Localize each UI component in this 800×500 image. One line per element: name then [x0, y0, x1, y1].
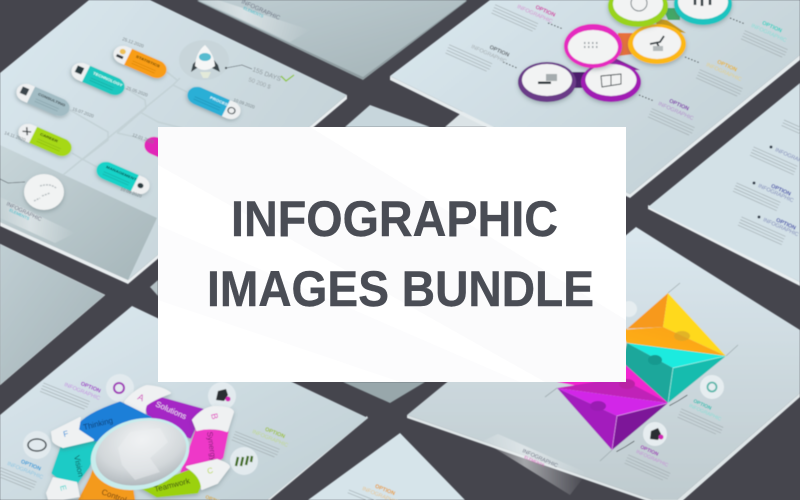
- segment: solutions: A: [136, 392, 146, 403]
- option label: purple: INFOGRAPHIC: [63, 382, 101, 402]
- title: [207, 191, 594, 317]
- timeline connector tree: [63, 72, 187, 175]
- pill: consulting: CONSULTING: [37, 91, 67, 108]
- timeline dates: 14.11.2020: [4, 130, 27, 143]
- sheet: bottom centre: [308, 433, 465, 500]
- segment: synergy: [182, 407, 233, 472]
- tip rules: [545, 283, 738, 461]
- timeline dates: 12.01.2020: [132, 132, 155, 145]
- title: IMAGES BUNDLE: [207, 261, 594, 317]
- days counter: 155 DAYS: [251, 66, 282, 83]
- pill: statistics: [110, 43, 170, 81]
- option label: orange: [348, 475, 401, 500]
- sheet: top-left timeline: [0, 0, 347, 284]
- option label: blue: OPTION: [20, 459, 42, 473]
- timeline dates: 15.07.2020: [72, 106, 95, 119]
- connectors: [572, 8, 686, 88]
- segment: solutions: Solutions: [154, 400, 188, 421]
- option label: teal triangle: [667, 390, 729, 436]
- title: INFOGRAPHIC: [231, 191, 558, 247]
- globe: [83, 408, 197, 500]
- timeline dates: 10.09.2020: [120, 186, 143, 199]
- sheet: top centre circles infographic: [390, 0, 800, 198]
- option label: magenta: [491, 0, 556, 37]
- option label: green: [232, 417, 291, 460]
- option label: purple triangle: OPTION: [639, 444, 659, 458]
- option label: grey: OPTION: [488, 45, 510, 59]
- segment: synergy: Synergy: [205, 431, 218, 461]
- pyramid purple: [557, 388, 668, 450]
- circle: teal: [674, 0, 732, 25]
- rocket badge: [179, 40, 229, 80]
- pill: management: MANAGEMENT: [105, 164, 138, 182]
- option label: purple triangle: [614, 436, 676, 482]
- option label: teal triangle: INFOGRAPHIC: [688, 403, 722, 423]
- segment: vision: E: [58, 484, 68, 492]
- list item 3: [738, 204, 800, 249]
- option label: yellow: INFOGRAPHIC: [705, 62, 742, 83]
- list item 3: OPTION: [775, 217, 797, 232]
- circle: magenta: [564, 24, 622, 68]
- segment: thinking: F: [62, 429, 69, 439]
- pill: process: PROCESS: [209, 95, 232, 108]
- list item 2: [733, 170, 796, 215]
- pyramid yellow: [620, 293, 726, 356]
- segment: thinking: Thinking: [82, 416, 114, 432]
- list item 2: OPTION: [770, 183, 792, 198]
- stamp text: ELEMENTS: [9, 207, 31, 221]
- pill: process: [184, 84, 244, 122]
- segment: control: [78, 463, 135, 500]
- icon circles: [23, 374, 258, 475]
- option label: magenta: OPTION: [534, 5, 556, 19]
- option label: teal: [741, 15, 795, 58]
- sheet: right list: [648, 83, 800, 286]
- circle: lime: [608, 0, 668, 27]
- days counter: 50 200 $: [247, 77, 272, 91]
- sheet: behind card pieces: [150, 105, 527, 403]
- segment: solutions: [125, 386, 202, 437]
- option label: yellow: OPTION: [716, 59, 738, 73]
- timeline dates: [4, 36, 256, 199]
- option label: purple: INFOGRAPHIC: [657, 101, 694, 122]
- icon: badge yellow: [621, 301, 637, 317]
- option label: purple: [40, 368, 103, 413]
- list item 0 lines: [782, 120, 800, 138]
- pill: technology: TECHNOLOGY: [92, 70, 124, 87]
- days counter: [225, 65, 294, 91]
- dotted leaders: [503, 18, 745, 101]
- circle: yellow: [628, 24, 686, 64]
- title card: [158, 127, 626, 382]
- option label: magenta: INFOGRAPHIC: [516, 4, 553, 25]
- pill: magenta, partly hidden: [141, 134, 201, 172]
- sheet: bottom-left hexa globe: [0, 306, 401, 500]
- sheet: top centre with stamp: [197, 0, 467, 80]
- option label: teal triangle: OPTION: [692, 398, 712, 412]
- icon: chess knight badge: [643, 422, 667, 446]
- option label: orange: OPTION: [374, 484, 396, 497]
- segment: synergy: B: [209, 412, 220, 420]
- list item 2: INFOGRAPHIC: [757, 183, 794, 204]
- option label: green: INFOGRAPHIC: [251, 429, 289, 449]
- pyramid teal: [620, 343, 726, 403]
- option label: blue: INFOGRAPHIC: [6, 461, 44, 481]
- option label: grey: INFOGRAPHIC: [470, 44, 507, 65]
- timeline dates: 25.12.2020: [122, 36, 145, 49]
- pill: technology: [68, 60, 128, 98]
- sheet: top centre with stamp: INFOGRAPHIC: [240, 0, 281, 22]
- timeline dates: 10.09.2020: [233, 97, 256, 110]
- option label: green: OPTION: [264, 427, 286, 440]
- sheet: left middle: [0, 244, 105, 385]
- option label: grey: [445, 29, 510, 77]
- option label: purple: OPTION: [80, 381, 101, 395]
- option label: teal: INFOGRAPHIC: [750, 23, 787, 44]
- list item 3: INFOGRAPHIC: [762, 217, 799, 238]
- option label: yellow: [696, 54, 750, 97]
- option label: purple: [648, 93, 702, 136]
- option label: purple triangle: INFOGRAPHIC: [635, 449, 669, 469]
- circle: dark purple: [518, 62, 576, 102]
- circle: purple: [581, 62, 641, 102]
- icon: badge teal: [700, 375, 724, 399]
- list item 1: [750, 139, 800, 179]
- start disc: [0, 174, 64, 210]
- stamp: ELEMENTS: [524, 454, 546, 468]
- option label: teal: OPTION: [761, 20, 783, 34]
- pill: career: CAREER: [39, 131, 59, 143]
- segment: teamwork: C: [206, 466, 214, 476]
- segment: teamwork: Teamwork: [153, 476, 192, 494]
- pill: career: [15, 121, 75, 159]
- segment: vision: Vision: [72, 455, 85, 478]
- stamp text: INFOGRAPHIC: [5, 201, 42, 223]
- sheet: bottom right triangles: [407, 227, 800, 500]
- stamp: [483, 434, 587, 495]
- segment: vision: [46, 438, 100, 500]
- option label: blue: [0, 450, 46, 492]
- pyramid magenta: [557, 360, 668, 403]
- segment: thinking: [52, 403, 150, 447]
- segment: teamwork: [136, 460, 229, 496]
- option label: purple: OPTION: [668, 98, 690, 112]
- sheet: top centre with stamp: ELEMENTS: [243, 5, 265, 19]
- pill: management: [93, 159, 153, 197]
- timeline dates: 25.05.2020: [126, 85, 149, 98]
- pill: consulting: [13, 81, 73, 119]
- pill: statistics: STATISTICS: [135, 54, 161, 68]
- stamp: INFOGRAPHIC: [521, 448, 559, 469]
